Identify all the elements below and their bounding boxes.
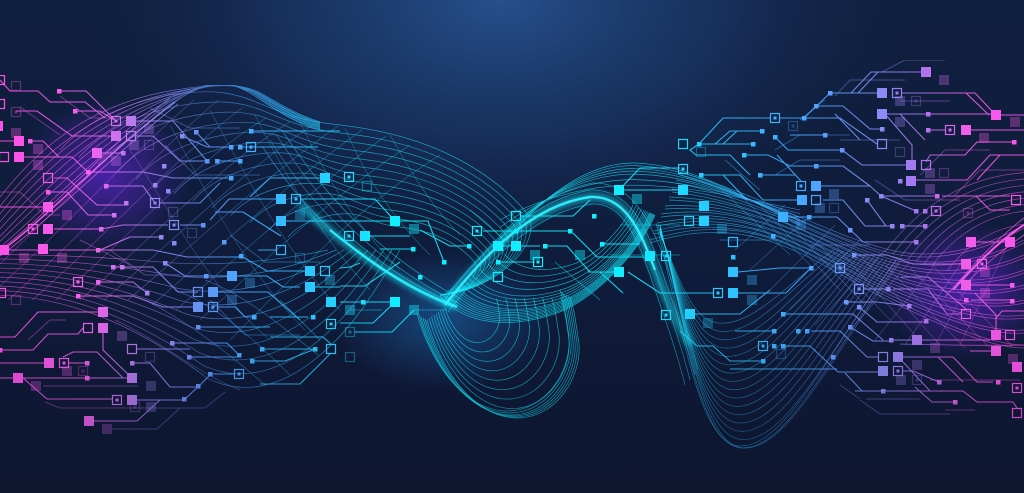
glow: right purple xyxy=(880,220,1024,360)
glow: behind centre wave xyxy=(335,250,555,390)
wave mesh: centre ribbon and lobes xyxy=(260,125,900,453)
wave ridge glow xyxy=(300,197,690,345)
circuit traces: left xyxy=(0,75,345,435)
glow: top centre xyxy=(0,0,1024,300)
wave mesh: right ribbon xyxy=(650,165,1024,355)
glow: left purple xyxy=(20,100,190,250)
wave mesh: left ribbon xyxy=(0,85,540,405)
circuit nodes: left xyxy=(0,75,345,437)
circuit traces: right xyxy=(680,60,1024,420)
circuit nodes: right xyxy=(678,65,1024,420)
circuit nodes: centre xyxy=(340,165,685,365)
circuit traces: centre xyxy=(340,165,685,340)
lower tone fade xyxy=(0,300,1024,493)
